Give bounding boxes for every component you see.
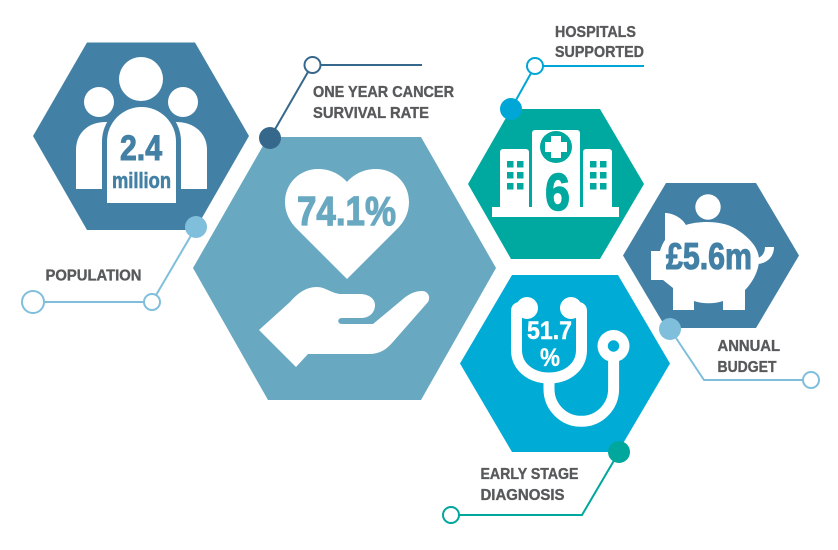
label: early stage diagnosis	[480, 466, 578, 504]
hexagon: budget	[623, 183, 799, 328]
value: 51.7%: 51.7	[527, 317, 572, 345]
label: early stage diagnosis: EARLY STAGE	[480, 466, 578, 483]
hexagon: population	[33, 42, 249, 230]
label: early stage diagnosis: DIAGNOSIS	[480, 487, 564, 504]
panel: one year cancer survival	[193, 137, 496, 400]
hexagon: survival	[193, 137, 496, 400]
connector: budget	[659, 318, 819, 388]
value: £5.6m: £5.6m	[666, 236, 752, 277]
panel: early stage diagnosis	[460, 275, 670, 452]
icon: stethoscope	[516, 297, 630, 421]
value: 51.7%: %	[540, 344, 560, 372]
value: 2.4 million	[112, 129, 171, 193]
label: hospitals supported: HOSPITALS	[555, 24, 636, 41]
value: 74.1%: 74.1%	[297, 188, 396, 234]
icon: open hand	[259, 287, 429, 367]
connector: diagnosis	[443, 441, 630, 523]
value: 51.7%	[527, 317, 572, 372]
panel: population	[33, 42, 249, 230]
label: hospitals supported: SUPPORTED	[555, 44, 644, 61]
label: hospitals supported	[555, 24, 644, 61]
icon: piggy bank	[651, 213, 774, 310]
connector: population	[22, 216, 207, 313]
label: annual budget: BUDGET	[718, 359, 777, 376]
value: 2.4 million: million	[112, 168, 171, 193]
label: one year cancer survival rate: SURVIVAL RATE	[313, 105, 429, 122]
label: annual budget: ANNUAL	[718, 338, 780, 355]
icon: hospital building	[492, 130, 619, 217]
label: population: POPULATION	[46, 268, 142, 284]
label: annual budget	[718, 338, 780, 376]
hexagon: hospitals	[468, 109, 644, 259]
panel: hospitals supported	[468, 109, 644, 259]
hexagon: diagnosis	[460, 275, 670, 452]
panel: annual budget	[623, 183, 799, 328]
icon: three people	[76, 57, 207, 208]
value: 6: 6	[545, 164, 570, 222]
label: one year cancer survival rate	[313, 84, 454, 122]
label: one year cancer survival rate: ONE YEAR CANCER	[313, 84, 454, 101]
icon: heart	[285, 169, 409, 279]
icon: coin	[695, 194, 721, 220]
value: 2.4 million: 2.4	[120, 129, 162, 168]
connector: survival	[259, 57, 422, 149]
connector: hospitals	[500, 58, 644, 120]
